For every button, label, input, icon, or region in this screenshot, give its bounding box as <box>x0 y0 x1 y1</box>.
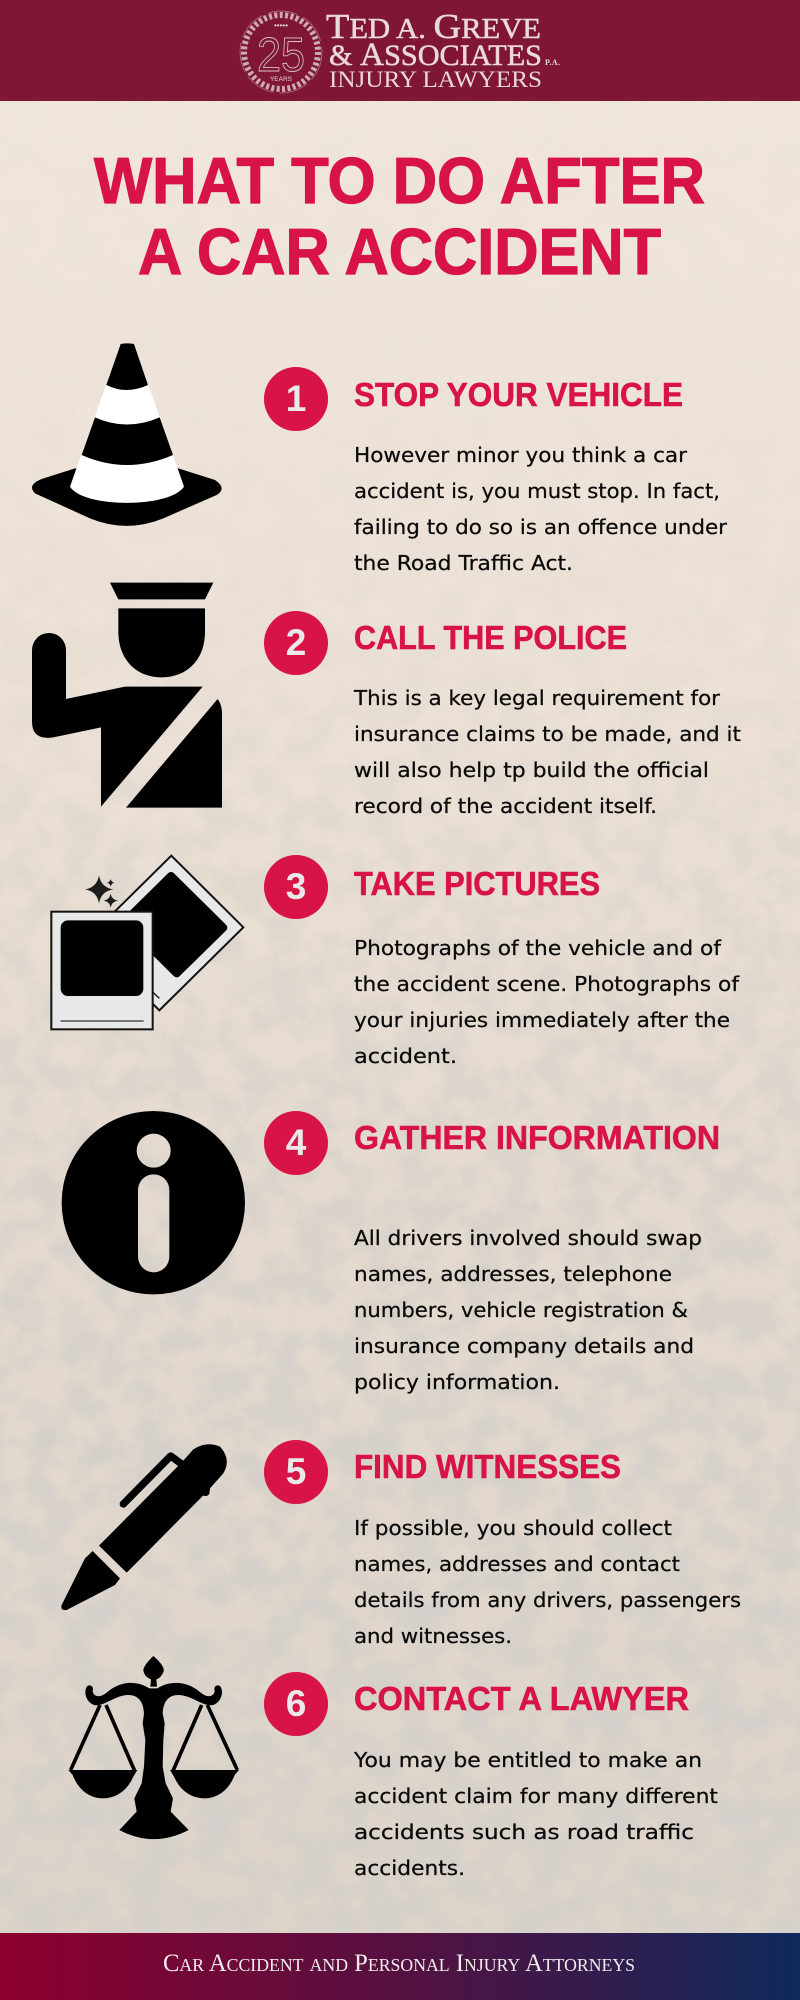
footer tagline: Car Accident and Personal Injury Attorneys <box>163 1950 635 1977</box>
footer band <box>0 1933 800 2000</box>
heading 6: CONTACT A LAWYER <box>354 1680 689 1717</box>
text 1: accident is, you must stop. In fact, <box>354 479 720 503</box>
heading 2: CALL THE POLICE <box>354 619 627 656</box>
title: A CAR ACCIDENT <box>138 215 661 288</box>
badge 1: 1 <box>286 378 306 419</box>
text 5 <box>354 1516 741 1648</box>
text 4: All drivers involved should swap <box>354 1226 702 1250</box>
header band with logo <box>0 0 800 101</box>
logo badge: 25 years: ••••• <box>274 21 288 30</box>
icon: photographs <box>51 856 243 1029</box>
text 4: policy information. <box>354 1370 560 1394</box>
heading 4: GATHER INFORMATION <box>354 1119 720 1156</box>
text 1: However minor you think a car <box>354 443 688 467</box>
badge 3: 3 <box>286 866 306 907</box>
title <box>94 144 705 288</box>
badge 4: 4 <box>286 1122 307 1163</box>
step 1 <box>264 367 728 575</box>
step 4 <box>264 1111 720 1394</box>
badge 6 <box>264 1672 328 1736</box>
text 6: accidents. <box>354 1856 465 1880</box>
badge 4 <box>264 1111 328 1175</box>
logo wordmark: P.A. <box>545 58 560 67</box>
badge 5 <box>264 1440 328 1504</box>
icon: traffic cone <box>32 343 222 526</box>
text 6 <box>353 1748 718 1880</box>
text 3: your injuries immediately after the <box>354 1008 730 1032</box>
title: WHAT TO DO AFTER <box>94 144 705 217</box>
text 3: accident. <box>354 1044 457 1068</box>
icon: police officer <box>32 583 222 808</box>
text 4 <box>354 1226 702 1394</box>
text 5: names, addresses and contact <box>354 1552 680 1576</box>
badge 3 <box>264 855 328 919</box>
text 1: the Road Traffic Act. <box>354 551 573 575</box>
text 2: insurance claims to be made, and it <box>354 722 741 746</box>
heading 1: STOP YOUR VEHICLE <box>354 376 683 413</box>
text 1: failing to do so is an offence under <box>354 515 728 539</box>
text 1 <box>354 443 728 575</box>
logo badge: 25 years: YEARS <box>270 76 293 83</box>
badge 2: 2 <box>286 622 306 663</box>
text 3 <box>354 936 740 1068</box>
text 3: Photographs of the vehicle and of <box>354 936 722 960</box>
step 5 <box>264 1440 741 1648</box>
logo badge: 25 years <box>240 11 322 93</box>
icon: information <box>62 1111 245 1294</box>
text 6: You may be entitled to make an <box>353 1748 702 1772</box>
badge 1 <box>264 367 328 431</box>
heading 5: FIND WITNESSES <box>354 1448 621 1485</box>
text 2: will also help tp build the official <box>354 758 709 782</box>
step 6 <box>264 1672 718 1880</box>
badge 2 <box>264 611 328 675</box>
step 3 <box>264 855 740 1068</box>
text 2: record of the accident itself. <box>354 794 657 818</box>
logo wordmark: TED A. GREVE <box>326 7 541 46</box>
text 2: This is a key legal requirement for <box>353 686 721 710</box>
logo wordmark <box>326 7 560 92</box>
logo badge: 25 years: 25 <box>257 29 305 82</box>
icon: scales of justice <box>68 1656 239 1839</box>
text 4: numbers, vehicle registration & <box>354 1298 688 1322</box>
text 4: insurance company details and <box>354 1334 694 1358</box>
text 4: names, addresses, telephone <box>354 1262 672 1286</box>
text 5: If possible, you should collect <box>354 1516 672 1540</box>
text 5: details from any drivers, passengers <box>354 1588 741 1612</box>
heading 3: TAKE PICTURES <box>354 865 600 902</box>
logo wordmark: INJURY LAWYERS <box>329 67 542 92</box>
step 2 <box>264 611 741 818</box>
text 3: the accident scene. Photographs of <box>354 972 740 996</box>
text 5: and witnesses. <box>354 1624 512 1648</box>
icon: pen <box>61 1444 227 1610</box>
text 6: accidents such as road traffic <box>354 1820 694 1844</box>
text 6: accident claim for many different <box>354 1784 718 1808</box>
text 2 <box>353 686 741 818</box>
logo wordmark: & ASSOCIATES <box>329 37 542 73</box>
badge 5: 5 <box>286 1451 306 1492</box>
badge 6: 6 <box>286 1683 306 1724</box>
